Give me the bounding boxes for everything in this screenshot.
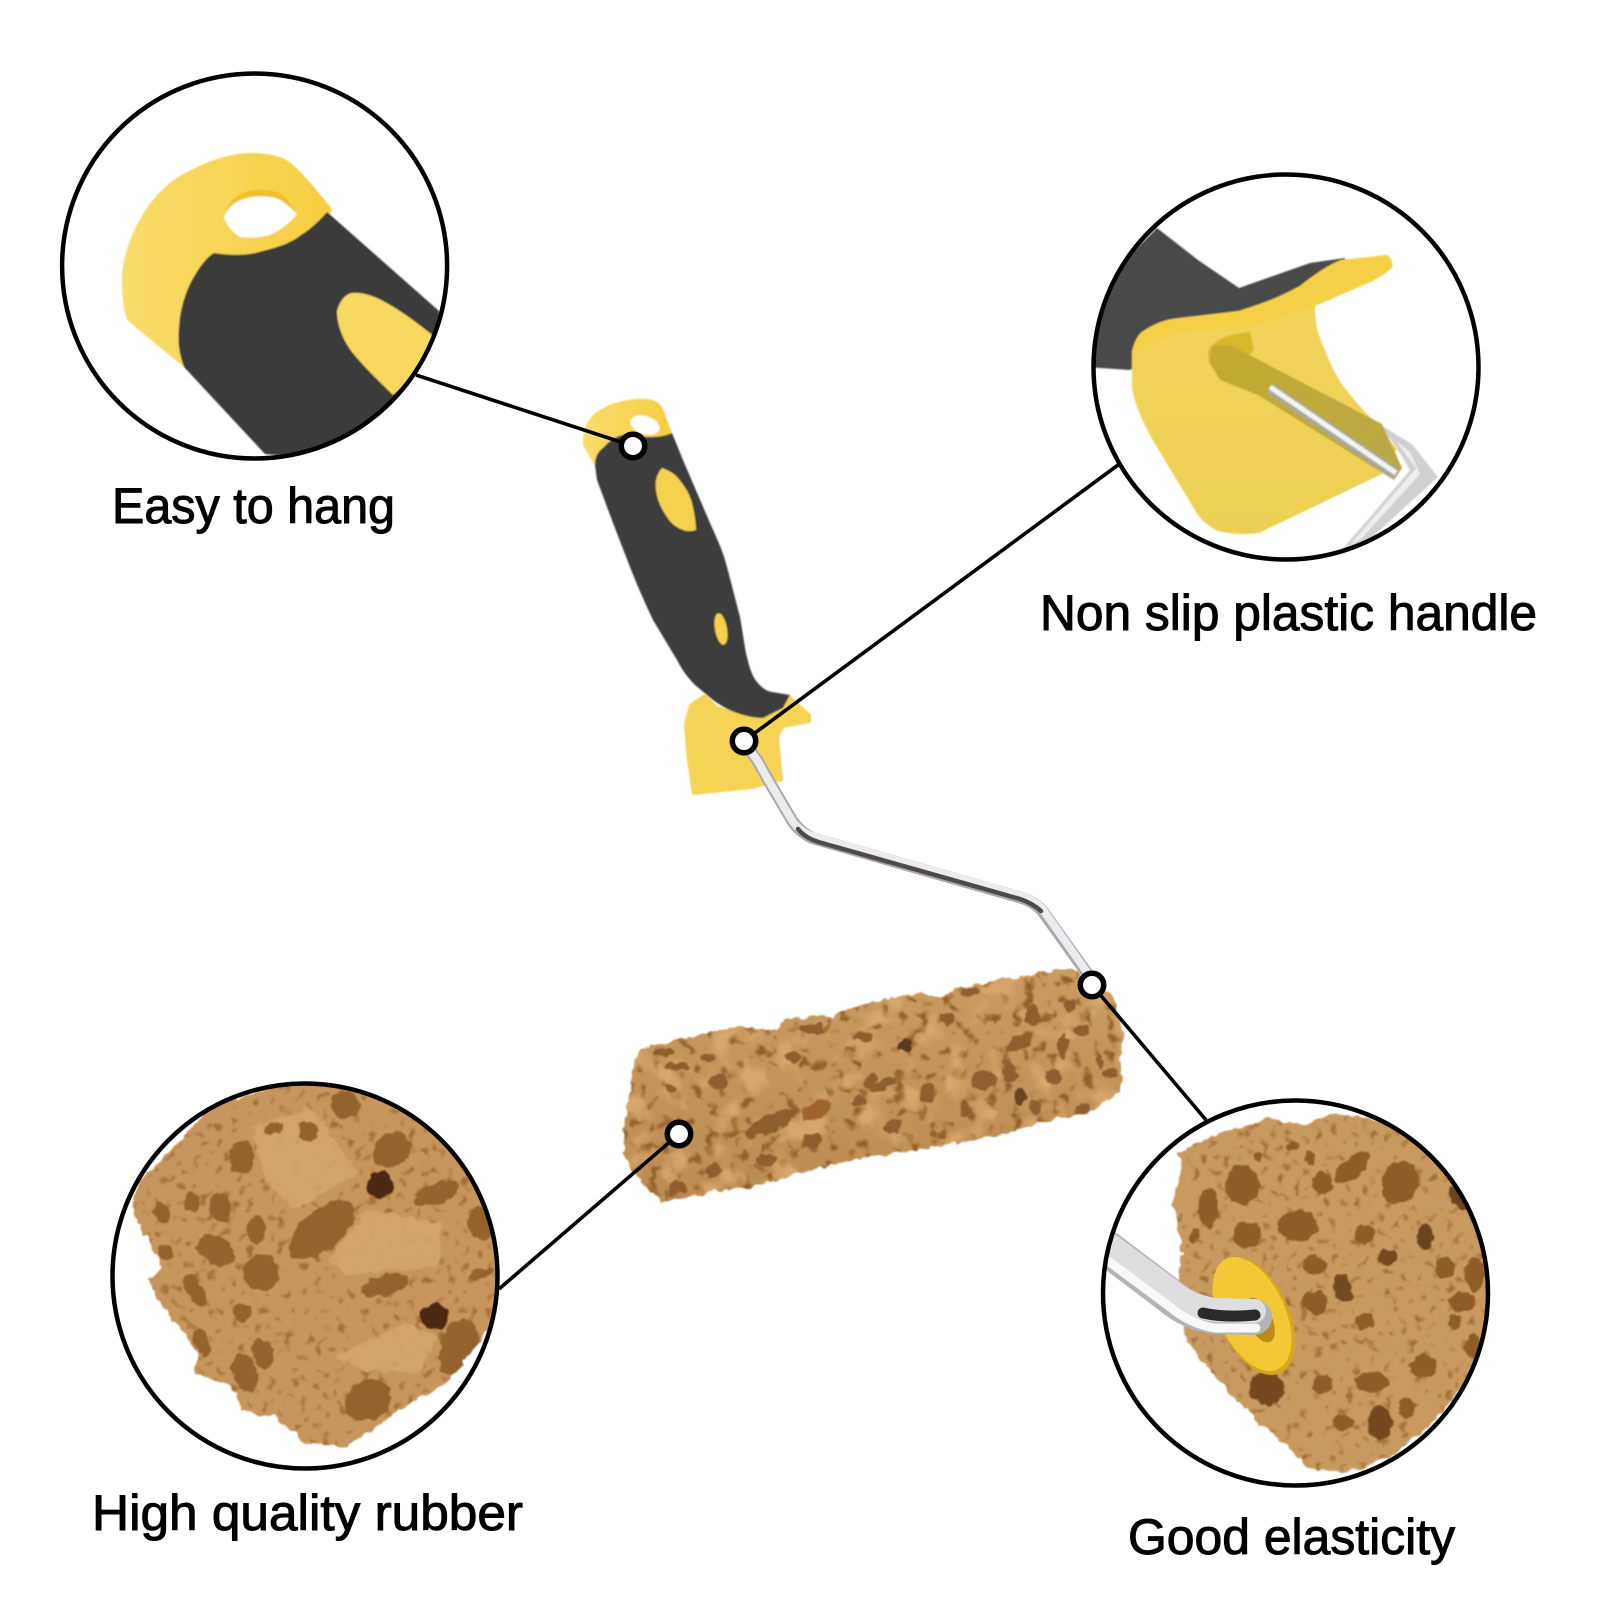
anchor dot [621, 434, 645, 458]
label: Easy to hang [112, 478, 395, 534]
handle yellow guard [685, 695, 810, 794]
callout: good elasticity [1080, 973, 1505, 1565]
label: Non slip plastic handle [1040, 585, 1537, 641]
sponge roller [610, 960, 1135, 1210]
handle black grip [595, 433, 790, 718]
ring [1094, 174, 1478, 560]
detail photo: sponge close-up [131, 1086, 496, 1449]
leader line [416, 375, 633, 446]
anchor dot [667, 1122, 691, 1146]
paint roller handle [583, 399, 810, 794]
handle small yellow oval [712, 612, 730, 646]
detail photo: guard and wire [1085, 228, 1438, 552]
metal roller frame wire [744, 742, 1089, 976]
chrome wire [1100, 1238, 1256, 1328]
label: Good elasticity [1128, 1509, 1455, 1565]
callout: non slip plastic handle [732, 174, 1537, 753]
ring [62, 74, 447, 458]
ring [112, 1084, 498, 1468]
anchor dot [732, 729, 756, 753]
washer [1212, 1257, 1296, 1375]
leader line [1092, 985, 1206, 1120]
label: High quality rubber [92, 1485, 523, 1541]
leader line [499, 1134, 679, 1289]
callout: easy to hang [62, 74, 645, 534]
detail photo: sponge, washer and wire [1106, 1112, 1486, 1474]
handle large yellow oval [656, 468, 696, 531]
silver elbow [1340, 423, 1438, 552]
handle yellow cap [583, 399, 672, 470]
callout: high quality rubber [92, 1075, 691, 1541]
anchor dot [1080, 973, 1104, 997]
leader line [744, 465, 1118, 741]
ring [1103, 1100, 1488, 1486]
handle hanging hole [628, 412, 662, 438]
detail photo: handle cap [122, 153, 450, 470]
